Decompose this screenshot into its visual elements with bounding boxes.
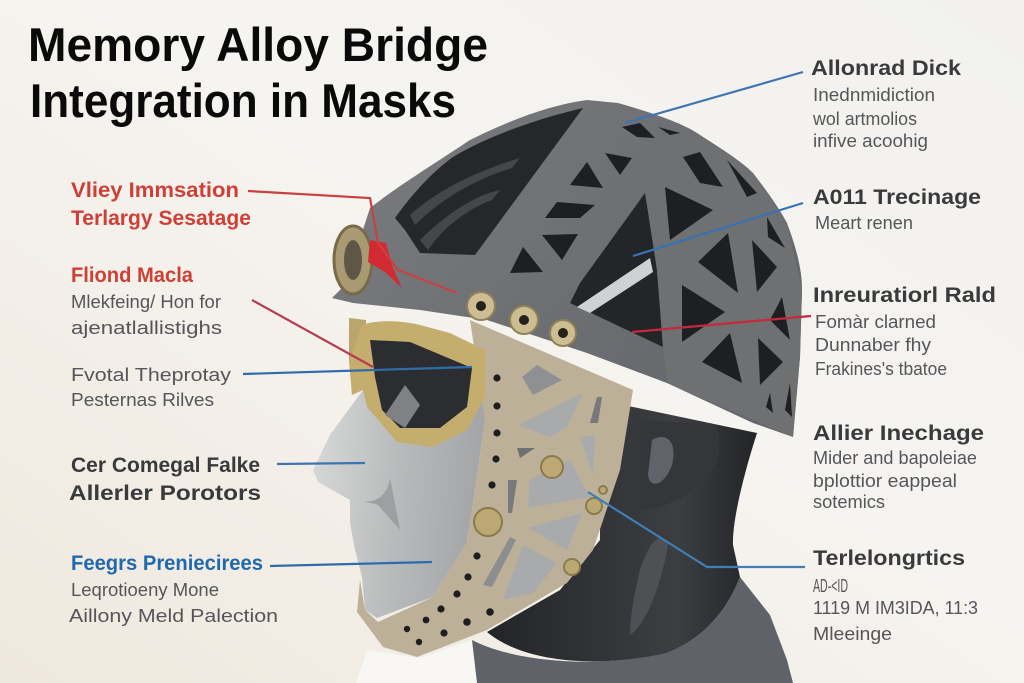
red actuator: [368, 240, 402, 288]
label: Allier Inechage: Mider and bapoleiae: [813, 447, 977, 468]
dome ribs: [410, 158, 520, 250]
title: [28, 18, 488, 127]
leader: fvotal: [243, 367, 472, 374]
helmet: [332, 100, 802, 437]
inner cavity: [570, 193, 663, 347]
mannequin illustration: [313, 100, 802, 683]
leader: comegal: [277, 463, 365, 464]
leader: rail: [632, 316, 811, 332]
label: Fvotal Theprotay: Fvotal Theprotay: [71, 364, 232, 385]
label: Terlelongrtics: 1119 M IM3IDA, 11:3: [813, 597, 978, 618]
goggle rim: [350, 321, 485, 447]
sweater collar: [472, 577, 793, 683]
label: Fliond Macla: Mlekfeing/ Hon for: [71, 291, 221, 312]
rivet holes: [476, 301, 568, 338]
label: Fliond Macla: ajenatlallistighs: [71, 317, 222, 338]
label: Fvotal Theprotay: Pesternas Rilves: [71, 389, 214, 410]
label: Terlelongrtics: [813, 547, 978, 644]
label: A011 Trecinage: [813, 186, 981, 233]
right lattice frame tone: [645, 133, 802, 437]
helmet shell: [332, 100, 802, 437]
label: Feegrs Preniecirees: Leqrotioeny Mone: [71, 579, 219, 600]
label: Feegrs Preniecirees: Aillony Meld Palection: [69, 605, 278, 626]
mask frame: [349, 318, 633, 657]
label: Allonrad Dick: [811, 57, 961, 151]
right labels: [811, 57, 996, 644]
head and neck: [487, 400, 757, 661]
label: Vliey Immsation: Vliey Immsation: [71, 179, 239, 202]
label: Fliond Macla: [71, 264, 222, 338]
label: Vliey Immsation: [71, 179, 251, 230]
label: Terlelongrtics: AD-<ID: [813, 575, 848, 596]
label: Terlelongrtics: Terlelongrtics: [813, 547, 965, 570]
label: Allier Inechage: bplottior eappeal: [813, 470, 957, 491]
ear highlight: [648, 437, 674, 484]
black dome window: [395, 108, 583, 255]
label: A011 Trecinage: Meart renen: [815, 212, 913, 233]
plate cut-outs: [483, 365, 602, 600]
stand base: [356, 640, 480, 683]
label: Terlelongrtics: Mleeinge: [813, 623, 892, 644]
nose shadow: [360, 478, 400, 530]
label: Fliond Macla: Fliond Macla: [71, 264, 193, 287]
leader: feegrs: [270, 562, 432, 566]
leader lines: [243, 72, 811, 567]
face: [313, 345, 490, 618]
leader: bottom right: [588, 492, 805, 567]
mask screws: [474, 456, 607, 575]
label: Fvotal Theprotay: [71, 364, 232, 410]
label: A011 Trecinage: A011 Trecinage: [813, 186, 981, 209]
leader: fliond: [252, 300, 373, 367]
label: Inreuratiorl Rald: Frakines's tbatoe: [815, 358, 947, 379]
label: Cer Comegal Falke: Cer Comegal Falke: [71, 454, 260, 477]
left labels: [69, 179, 278, 626]
leader: top left red: [248, 191, 457, 293]
label: Allonrad Dick: wol artmolios: [812, 108, 917, 129]
brim rivets: [467, 292, 576, 346]
label: Inreuratiorl Rald: Dunnaber fhy: [815, 334, 932, 355]
plate perforations: [404, 374, 501, 645]
goggle strap: [349, 318, 366, 395]
jaw and cheek plate: [357, 320, 633, 657]
label: Feegrs Preniecirees: [69, 552, 278, 626]
lens reflection: [385, 385, 420, 428]
side gear: [334, 226, 372, 294]
label: Allonrad Dick: Inednmidiction: [813, 84, 935, 105]
label: Allonrad Dick: infive acoohig: [813, 130, 928, 151]
label: Inreuratiorl Rald: [813, 284, 996, 379]
label: Cer Comegal Falke: Allerler Porotors: [69, 482, 261, 505]
label: Vliey Immsation: Terlargy Sesatage: [71, 207, 251, 230]
lattice openings: [510, 123, 792, 417]
ear: [640, 420, 720, 510]
leader: alloy: [633, 203, 803, 256]
goggle lens: [370, 340, 472, 428]
label: Inreuratiorl Rald: Fomàr clarned: [815, 311, 936, 332]
label: Feegrs Preniecirees: Feegrs Preniecirees: [71, 552, 263, 575]
title: Integration in Masks: [30, 74, 456, 127]
title: Memory Alloy Bridge: [28, 18, 488, 71]
label: Allier Inechage: [813, 422, 984, 512]
label: Allier Inechage: Allier Inechage: [813, 422, 984, 445]
label: Cer Comegal Falke: [69, 454, 261, 505]
leader: top right: [625, 72, 803, 123]
neck highlight: [630, 538, 668, 635]
label: Allonrad Dick: Allonrad Dick: [811, 57, 961, 80]
alloy strut: [577, 258, 653, 313]
label: Inreuratiorl Rald: Inreuratiorl Rald: [813, 284, 996, 307]
gear centre: [344, 240, 362, 280]
label: Allier Inechage: sotemics: [813, 491, 885, 512]
